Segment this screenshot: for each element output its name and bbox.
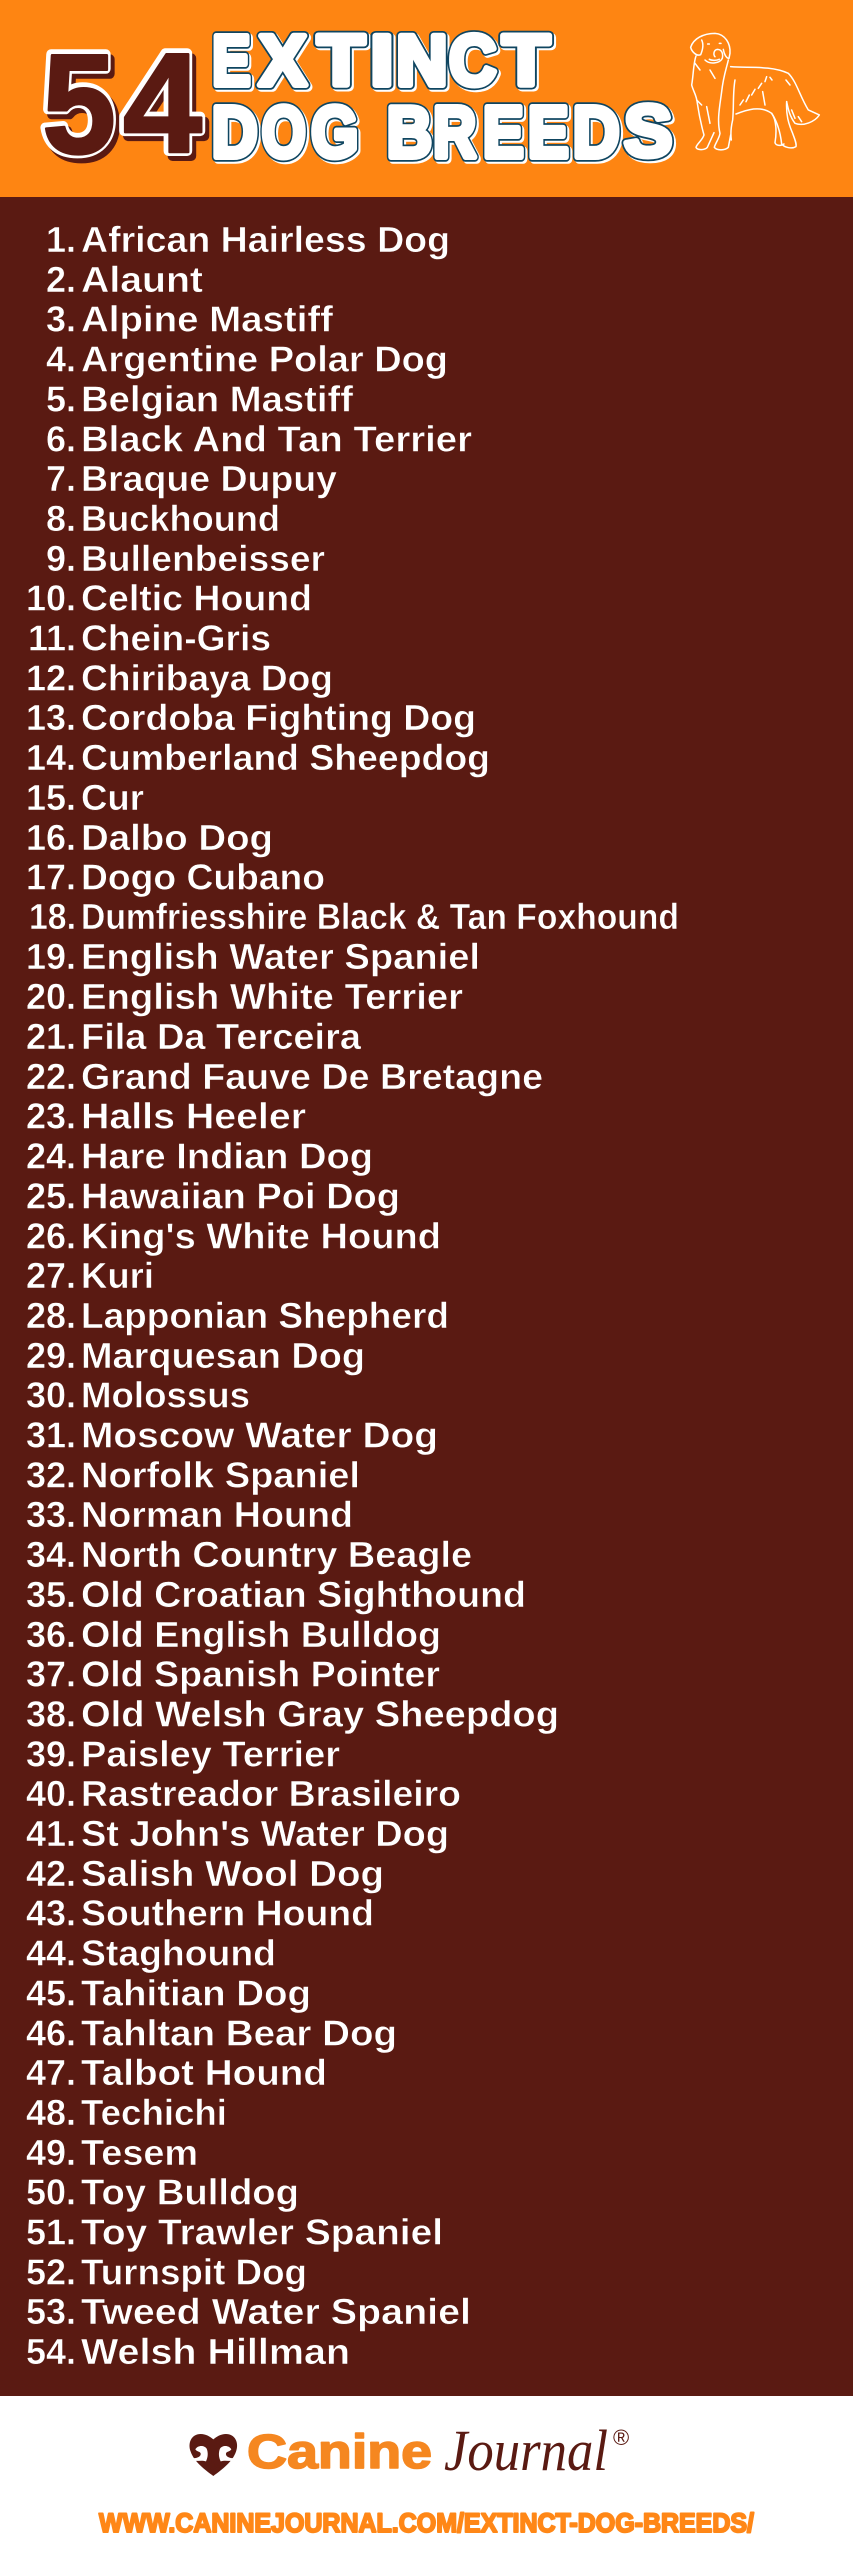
list item 15: 15.: [26, 777, 76, 818]
title line: Dog Breeds: D: [575, 95, 622, 175]
list item 1: 1.: [46, 219, 76, 260]
list item 32: Norfolk Spaniel: [81, 1454, 360, 1495]
title number: 54: 5: [41, 24, 115, 183]
list item 40: 40.: [26, 1773, 76, 1814]
list item 18: 18.: [29, 896, 76, 937]
list item 47: 47.: [26, 2052, 76, 2093]
list item 34: North Country Beagle: [81, 1534, 472, 1575]
list item 23: 23.: [26, 1096, 76, 1137]
title line: Dog Breeds: R: [433, 93, 476, 173]
list item 23: Halls Heeler: [81, 1096, 306, 1137]
list item 45: 45.: [26, 1972, 76, 2013]
title line: Dog Breeds: R: [435, 95, 478, 175]
title line: Extinct: N: [396, 22, 448, 101]
list item 35: 35.: [26, 1574, 76, 1615]
title line: Dog Breeds: D: [214, 95, 260, 175]
list item 43: Southern Hound: [81, 1893, 374, 1934]
list item 54: 54.: [26, 2331, 76, 2372]
list item 3: 3.: [46, 299, 76, 340]
title line: Dog Breeds: D: [573, 93, 620, 173]
list item 15: [26, 777, 144, 818]
list item 42: 42.: [26, 1853, 76, 1894]
title line: Dog Breeds: S: [624, 92, 672, 172]
list item 22: Grand Fauve De Bretagne: [81, 1056, 543, 1097]
list item 30: Molossus: [81, 1375, 250, 1416]
title line: Dog Breeds: E: [528, 93, 569, 173]
list item 6: Black And Tan Terrier: [81, 418, 472, 459]
title line: Extinct: E: [212, 22, 250, 101]
list item 27: [26, 1255, 154, 1296]
title line: Dog Breeds: G: [311, 93, 358, 173]
title line: Extinct: N: [396, 22, 448, 101]
website url: WWW.CANINEJOURNAL.COM/EXTINCT-DOG-BREEDS/: [99, 2508, 754, 2538]
list item 31: 31.: [26, 1414, 76, 1456]
list item 9: Bullenbeisser: [81, 538, 325, 579]
list item 2: Alaunt: [81, 259, 203, 300]
icon: dog line drawing: [691, 33, 819, 150]
list item 26: 26.: [26, 1215, 76, 1256]
title line: Dog Breeds: B: [387, 93, 432, 173]
list item 20: English White Terrier: [81, 976, 463, 1017]
title line: Extinct: T: [502, 22, 550, 101]
title line: Dog Breeds: D: [212, 93, 258, 173]
list item 29: Marquesan Dog: [81, 1335, 365, 1376]
list item 28: Lapponian Shepherd: [81, 1295, 449, 1336]
list item 8: Buckhound: [81, 498, 280, 539]
title line: Extinct: N: [398, 24, 450, 103]
list item 39: 39.: [26, 1733, 76, 1774]
logo wordmark: Canine: Canine: [247, 2426, 432, 2479]
title line: Extinct: X: [261, 24, 308, 103]
title number: 54: 5: [42, 25, 116, 184]
panel: header: [0, 0, 853, 197]
list item 43: 43.: [26, 1893, 76, 1934]
title line: Dog Breeds: O: [264, 95, 308, 175]
list item 1: African Hairless Dog: [81, 219, 450, 260]
list item 12: Chiribaya Dog: [81, 657, 333, 698]
title line: Extinct: T: [504, 24, 552, 103]
list item 31: Moscow Water Dog: [81, 1414, 438, 1456]
panel: footer: [0, 2396, 853, 2560]
list item 29: 29.: [26, 1335, 76, 1376]
list item 49: Tesem: [81, 2132, 198, 2173]
list item 37: Old Spanish Pointer: [81, 1654, 440, 1695]
list item 53: Tweed Water Spaniel: [81, 2291, 471, 2332]
list item 27: 27.: [26, 1255, 76, 1296]
title line: Dog Breeds: G: [313, 95, 360, 175]
list item 39: Paisley Terrier: [81, 1733, 340, 1774]
title number: 54: [41, 23, 205, 188]
list item 34: 34.: [26, 1534, 76, 1575]
list item 7: 7.: [46, 458, 76, 499]
title number: 54: 5: [45, 29, 119, 188]
list item 9: 9.: [46, 538, 76, 579]
list item 13: 13.: [26, 697, 76, 738]
list item 49: 49.: [26, 2132, 76, 2173]
list item 46: Tahltan Bear Dog: [81, 2012, 397, 2053]
title number: 54: 4: [122, 23, 201, 182]
list item 18: Dumfriesshire Black & Tan Foxhound: [81, 896, 679, 937]
title line: Dog Breeds: D: [212, 93, 258, 173]
list item 54: Welsh Hillman: [81, 2331, 350, 2372]
list item 37: 37.: [26, 1654, 76, 1695]
list item 21: Fila Da Terceira: [81, 1016, 362, 1057]
title line: Extinct: I: [372, 24, 396, 103]
title line: Dog Breeds: E: [528, 93, 569, 173]
list item 14: 14.: [26, 737, 76, 778]
logo wordmark: Journal: Journal: [444, 2418, 608, 2483]
title number: 54: 4: [126, 28, 205, 187]
list item 51: Toy Trawler Spaniel: [81, 2212, 443, 2252]
list item 46: 46.: [26, 2012, 76, 2053]
title line: Extinct: T: [318, 22, 365, 101]
list item 24: 24.: [26, 1136, 76, 1177]
list item 48: 48.: [26, 2092, 76, 2133]
list item 19: English Water Spaniel: [81, 936, 480, 977]
list item 14: Cumberland Sheepdog: [81, 737, 490, 778]
list item 21: 21.: [26, 1016, 76, 1057]
title line: Dog Breeds: B: [389, 95, 434, 175]
title line: Dog Breeds: O: [262, 93, 306, 173]
list item 16: Dalbo Dog: [81, 817, 273, 858]
list item 10: Celtic Hound: [81, 578, 312, 619]
list item 42: Salish Wool Dog: [81, 1853, 384, 1894]
list item 11: Chein-Gris: [81, 618, 271, 658]
list item 3: Alpine Mastiff: [81, 299, 334, 340]
list item 30: 30.: [26, 1375, 76, 1416]
list item 5: Belgian Mastiff: [81, 378, 354, 419]
list item 52: 52.: [26, 2251, 76, 2292]
list item 19: 19.: [26, 936, 76, 977]
list item 35: Old Croatian Sighthound: [81, 1574, 526, 1615]
title line: Dog Breeds: R: [433, 93, 476, 173]
list item 24: Hare Indian Dog: [81, 1136, 373, 1177]
list item 36: Old English Bulldog: [81, 1614, 441, 1655]
list item 41: 41.: [26, 1813, 76, 1854]
list item 20: 20.: [26, 976, 76, 1017]
list item 50: Toy Bulldog: [81, 2172, 299, 2213]
title line: Extinct: C: [449, 22, 496, 101]
title line: Extinct: C: [449, 22, 496, 101]
list item 47: Talbot Hound: [81, 2052, 327, 2093]
title line: Extinct: T: [318, 22, 365, 101]
title line: Extinct: E: [212, 22, 250, 101]
list item 33: Norman Hound: [81, 1494, 353, 1535]
list item 7: Braque Dupuy: [81, 458, 337, 499]
icon: Canine Journal heart nose logo: [190, 2434, 237, 2476]
list item 44: 44.: [26, 1933, 76, 1974]
list item 13: Cordoba Fighting Dog: [81, 697, 476, 738]
list item 38: Old Welsh Gray Sheepdog: [81, 1694, 559, 1734]
list item 25: Hawaiian Poi Dog: [81, 1175, 400, 1216]
title line: Extinct: X: [259, 22, 306, 101]
list item 48: Techichi: [81, 2092, 227, 2133]
title line: Extinct: I: [370, 22, 394, 101]
list item 45: Tahitian Dog: [81, 1972, 311, 2013]
list item 49: [26, 2132, 198, 2173]
list item 51: 51.: [26, 2212, 76, 2252]
list item 28: 28.: [26, 1295, 76, 1336]
title line: Extinct: C: [451, 24, 498, 103]
list item 8: 8.: [46, 498, 76, 539]
list item 32: 32.: [26, 1454, 76, 1495]
list item 44: Staghound: [81, 1933, 276, 1974]
title line: Dog Breeds: G: [311, 93, 358, 173]
title line: Dog Breeds: D: [573, 93, 620, 173]
list item 26: King's White Hound: [81, 1215, 441, 1256]
title line: Extinct: X: [259, 22, 306, 101]
registered mark: ®: [613, 2425, 629, 2450]
title number: 54: 4: [123, 24, 202, 183]
title line: Dog Breeds: B: [387, 93, 432, 173]
title line: Extinct: T: [502, 22, 550, 101]
list item 22: 22.: [26, 1056, 76, 1097]
title line: Dog Breeds: S: [626, 94, 674, 174]
title line: Extinct: E: [214, 24, 252, 103]
list item 50: 50.: [26, 2172, 76, 2213]
list item 2: 2.: [46, 259, 76, 300]
list item 41: St John's Water Dog: [81, 1813, 449, 1854]
list item 17: Dogo Cubano: [81, 857, 325, 898]
title line: Extinct: I: [370, 22, 394, 101]
list item 36: 36.: [26, 1614, 76, 1655]
title line: Dog Breeds: S: [624, 92, 672, 172]
list item 25: 25.: [26, 1175, 76, 1216]
title line: Dog Breeds: E: [485, 95, 526, 175]
list item 53: 53.: [26, 2291, 76, 2332]
list item 33: 33.: [26, 1494, 76, 1535]
list item 10: 10.: [26, 578, 76, 619]
list item 4: Argentine Polar Dog: [81, 339, 448, 380]
list item 52: Turnspit Dog: [81, 2251, 307, 2292]
list item 11: 11.: [28, 618, 76, 658]
title line: Dog Breeds: E: [530, 95, 571, 175]
list item 12: 12.: [26, 657, 76, 698]
list item 16: 16.: [26, 817, 76, 858]
list item 40: Rastreador Brasileiro: [81, 1773, 461, 1814]
title line: Dog Breeds: [212, 92, 674, 175]
title line: Extinct: T: [320, 24, 367, 103]
list item 5: 5.: [46, 378, 76, 419]
list item 15: Cur: [81, 777, 144, 818]
list item 27: Kuri: [81, 1255, 154, 1296]
list item 4: 4.: [46, 339, 76, 380]
list item 6: 6.: [46, 418, 76, 459]
list item 17: 17.: [26, 857, 76, 898]
title line: Dog Breeds: E: [483, 93, 524, 173]
title line: Dog Breeds: O: [262, 93, 306, 173]
list item 38: 38.: [26, 1694, 76, 1734]
title line: Dog Breeds: E: [483, 93, 524, 173]
title line: Extinct: [212, 22, 552, 103]
